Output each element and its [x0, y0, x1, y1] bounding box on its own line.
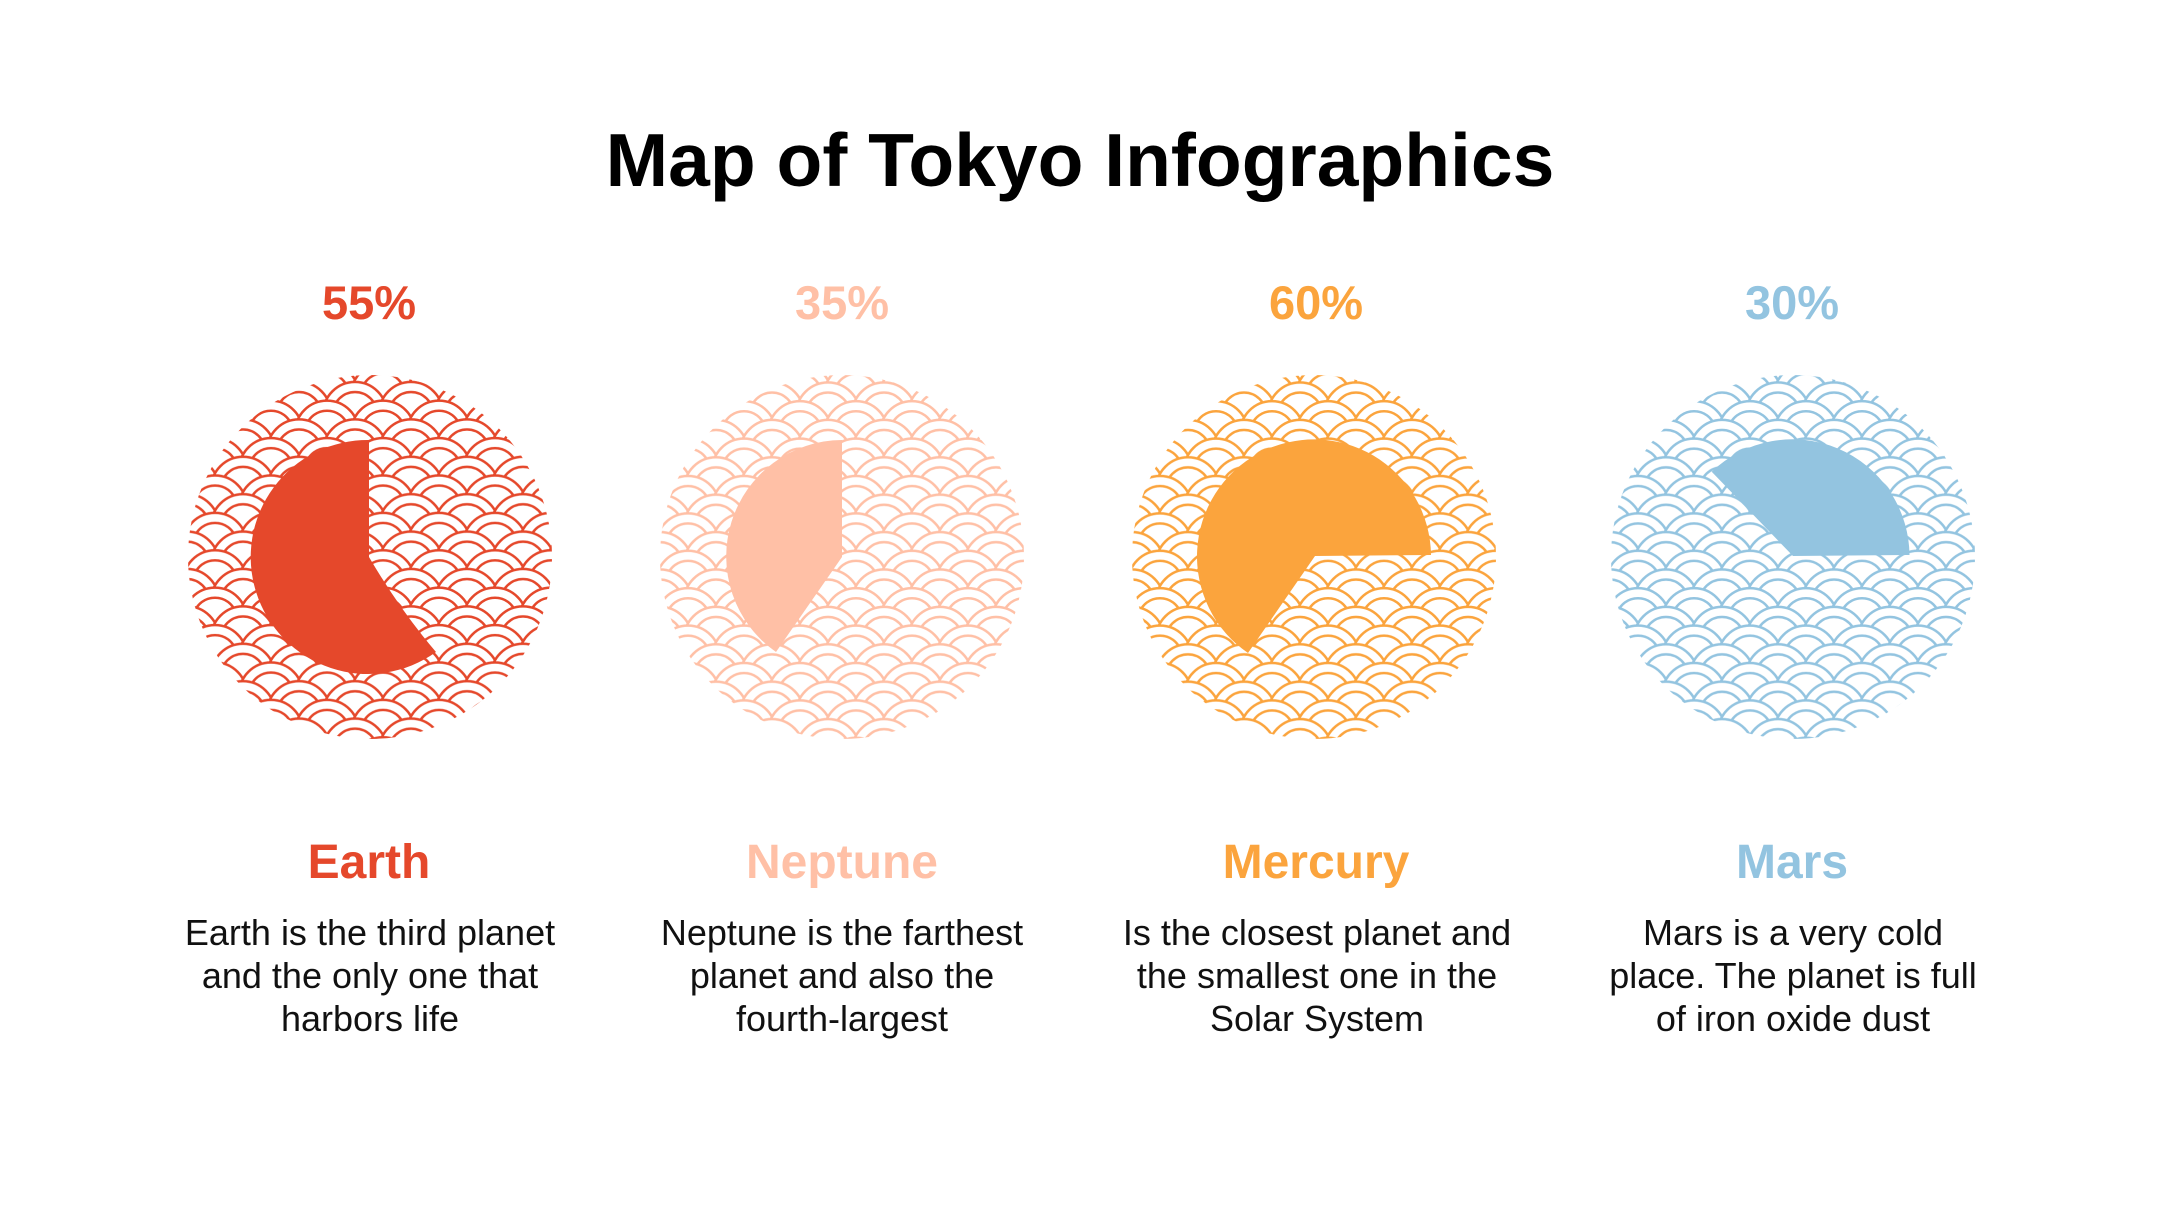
- text block: Mercury: [1123, 912, 1511, 1039]
- wedge: Neptune: [726, 440, 842, 652]
- pattern disc: Earth: [188, 375, 552, 739]
- heading: Earth: Earth: [308, 836, 430, 889]
- wedge: Mercury: [1197, 439, 1431, 653]
- title: Map of Tokyo Infographics: [606, 118, 1554, 202]
- percentage: Mercury: 60%: [1269, 276, 1363, 329]
- text block: Mercury: Is the closest planet and: [1123, 912, 1511, 953]
- heading: Mercury: Mercury: [1223, 836, 1409, 889]
- text block: Earth: harbors life: [281, 998, 459, 1039]
- text block: Earth: Earth is the third planet: [185, 912, 555, 953]
- percentage: Neptune: 35%: [795, 276, 889, 329]
- percentage: Earth: 55%: [322, 276, 416, 329]
- text block: Neptune: [661, 912, 1023, 1039]
- text block: Mars: [1609, 912, 1977, 1039]
- percentage: Mars: 30%: [1745, 276, 1839, 329]
- text block: Earth: and the only one that: [202, 955, 538, 996]
- chart: Mercury 60%: [1132, 375, 1496, 739]
- heading: Neptune: Neptune: [746, 836, 938, 889]
- text block: Neptune: Neptune is the farthest: [661, 912, 1023, 953]
- pattern disc: Mars: [1611, 375, 1975, 739]
- text block: Earth: [185, 912, 555, 1039]
- pattern disc: Mercury: [1132, 375, 1496, 739]
- text block: Neptune: planet and also the: [690, 955, 994, 996]
- chart: Earth 55%: [188, 375, 552, 739]
- wedge: Mars: [1712, 439, 1910, 556]
- text block: Mercury: Solar System: [1210, 998, 1424, 1039]
- heading: Mars: Mars: [1736, 836, 1848, 889]
- chart: Mars 30%: [1611, 375, 1975, 739]
- text block: Mars: of iron oxide dust: [1656, 998, 1930, 1039]
- chart: Neptune 35%: [660, 375, 1024, 739]
- text block: Neptune: fourth-largest: [736, 998, 948, 1039]
- wedge: Earth: [251, 440, 436, 674]
- text block: Mars: Mars is a very cold: [1643, 912, 1943, 953]
- text block: Mars: place. The planet is full: [1609, 955, 1977, 996]
- pattern disc: Neptune: [660, 375, 1024, 739]
- text block: Mercury: the smallest one in the: [1137, 955, 1497, 996]
